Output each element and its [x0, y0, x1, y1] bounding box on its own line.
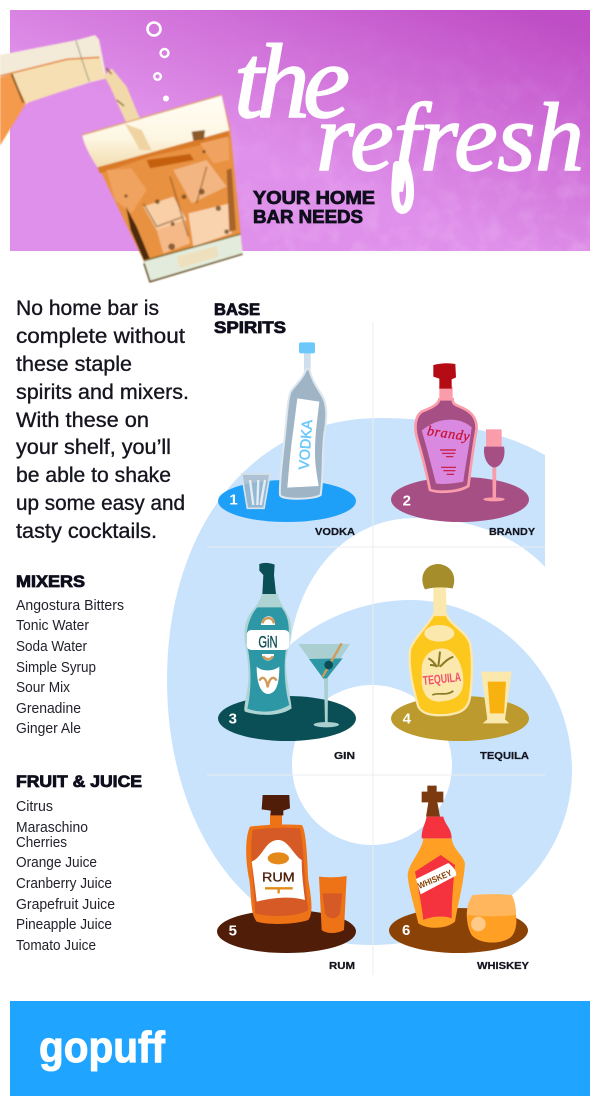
illustration: tequila bottle and shot: 4	[403, 710, 412, 727]
illustration: gin bottle and martini: GiN	[258, 633, 278, 652]
mixers list: Sour Mix	[16, 680, 71, 696]
intro text: be able to shake	[16, 464, 171, 487]
base spirits heading: BASE	[214, 301, 260, 319]
big number six	[167, 418, 572, 945]
illustration: gin bottle and martini: 3	[229, 710, 237, 727]
fruit and juice list	[16, 773, 142, 954]
subtitle: BAR NEEDS	[253, 207, 363, 227]
title: the refresh	[234, 23, 584, 210]
intro text	[16, 297, 189, 543]
plate	[391, 696, 529, 741]
mixers list: Tonic Water	[16, 618, 89, 634]
spirit 3: gin	[218, 563, 356, 762]
illustration: whiskey bottle and glass: 6	[402, 922, 410, 939]
illustration: vodka bottle and shot glass	[229, 342, 326, 509]
plate	[218, 480, 356, 522]
label: RUM	[329, 960, 355, 972]
label: GIN	[334, 750, 355, 762]
title: the refresh: the	[234, 23, 350, 140]
plate	[389, 908, 528, 953]
illustration: rum bottle and shot: 5	[229, 922, 237, 939]
subtitle: YOUR HOME	[253, 188, 375, 208]
illustration: tequila bottle and shot	[403, 564, 512, 727]
illustration: vodka bottle and shot glass: VODKA	[297, 419, 316, 470]
title: the refresh: refresh	[316, 84, 584, 192]
illustration: vodka bottle and shot glass: 1	[229, 492, 238, 509]
spirit 2: brandy	[391, 363, 535, 538]
fruit and juice list: Orange Juice	[16, 855, 97, 871]
fruit and juice list: Citrus	[16, 799, 53, 815]
illustration: brandy bottle and glass: 2	[403, 493, 411, 510]
mixers list	[16, 573, 124, 737]
mixers list: Grenadine	[16, 701, 81, 717]
footer bar	[10, 1001, 590, 1096]
intro text: No home bar is	[16, 297, 159, 320]
intro text: tasty cocktails.	[16, 520, 157, 543]
plate	[218, 696, 356, 741]
illustration: gin bottle and martini	[229, 563, 350, 727]
fruit and juice list: Grapefruit Juice	[16, 897, 115, 913]
intro text: With these on	[16, 409, 149, 432]
illustration: whiskey bottle and glass	[402, 786, 516, 942]
mixers heading: MIXERS	[16, 573, 85, 591]
base spirits heading	[214, 301, 286, 337]
illustration: whiskey bottle and glass: WHISKEY	[416, 867, 453, 891]
subtitle	[253, 188, 375, 227]
mixers list: Soda Water	[16, 639, 87, 655]
intro text: these staple	[16, 353, 132, 376]
illustration: brandy bottle and glass: brandy	[426, 424, 471, 445]
fruit and juice list: Cranberry Juice	[16, 876, 112, 892]
fruit and juice list: Cherries	[16, 835, 67, 851]
fruit and juice list: Maraschino	[16, 820, 88, 836]
fruit and juice heading: FRUIT & JUICE	[16, 773, 142, 791]
illustration: tequila bottle and shot: TEQUILA	[422, 670, 462, 688]
illustration: rum bottle and shot	[229, 795, 347, 939]
intro text: your shelf, you’ll	[16, 436, 171, 459]
plate	[217, 910, 356, 953]
logo: gopuff: gopuff	[39, 1023, 165, 1072]
mixers list: Ginger Ale	[16, 721, 81, 737]
illustration: brandy bottle and glass	[403, 363, 505, 510]
label: TEQUILA	[480, 750, 529, 762]
base spirits heading: SPIRITS	[214, 319, 286, 337]
mixers list: Angostura Bitters	[16, 598, 124, 614]
banner	[10, 10, 590, 251]
intro text: complete without	[16, 325, 185, 348]
icon: bubbles	[148, 22, 169, 102]
spirit 1: vodka	[218, 342, 356, 538]
intro text: up some easy and	[16, 492, 185, 515]
label: BRANDY	[489, 526, 535, 538]
illustration: rum bottle and shot: RUM	[262, 870, 295, 884]
label: WHISKEY	[477, 960, 529, 972]
fruit and juice list: Pineapple Juice	[16, 917, 112, 933]
intro text: spirits and mixers.	[16, 381, 189, 404]
spirit 5: rum	[217, 795, 356, 972]
plate	[391, 477, 529, 522]
spirit 4: tequila	[391, 564, 529, 762]
mixers list: Simple Syrup	[16, 660, 96, 676]
photo: bottle pouring into glass	[0, 35, 243, 282]
label: VODKA	[315, 526, 355, 538]
grid lines	[207, 322, 545, 975]
spirit 6: whiskey	[389, 786, 529, 972]
fruit and juice list: Tomato Juice	[16, 938, 96, 954]
